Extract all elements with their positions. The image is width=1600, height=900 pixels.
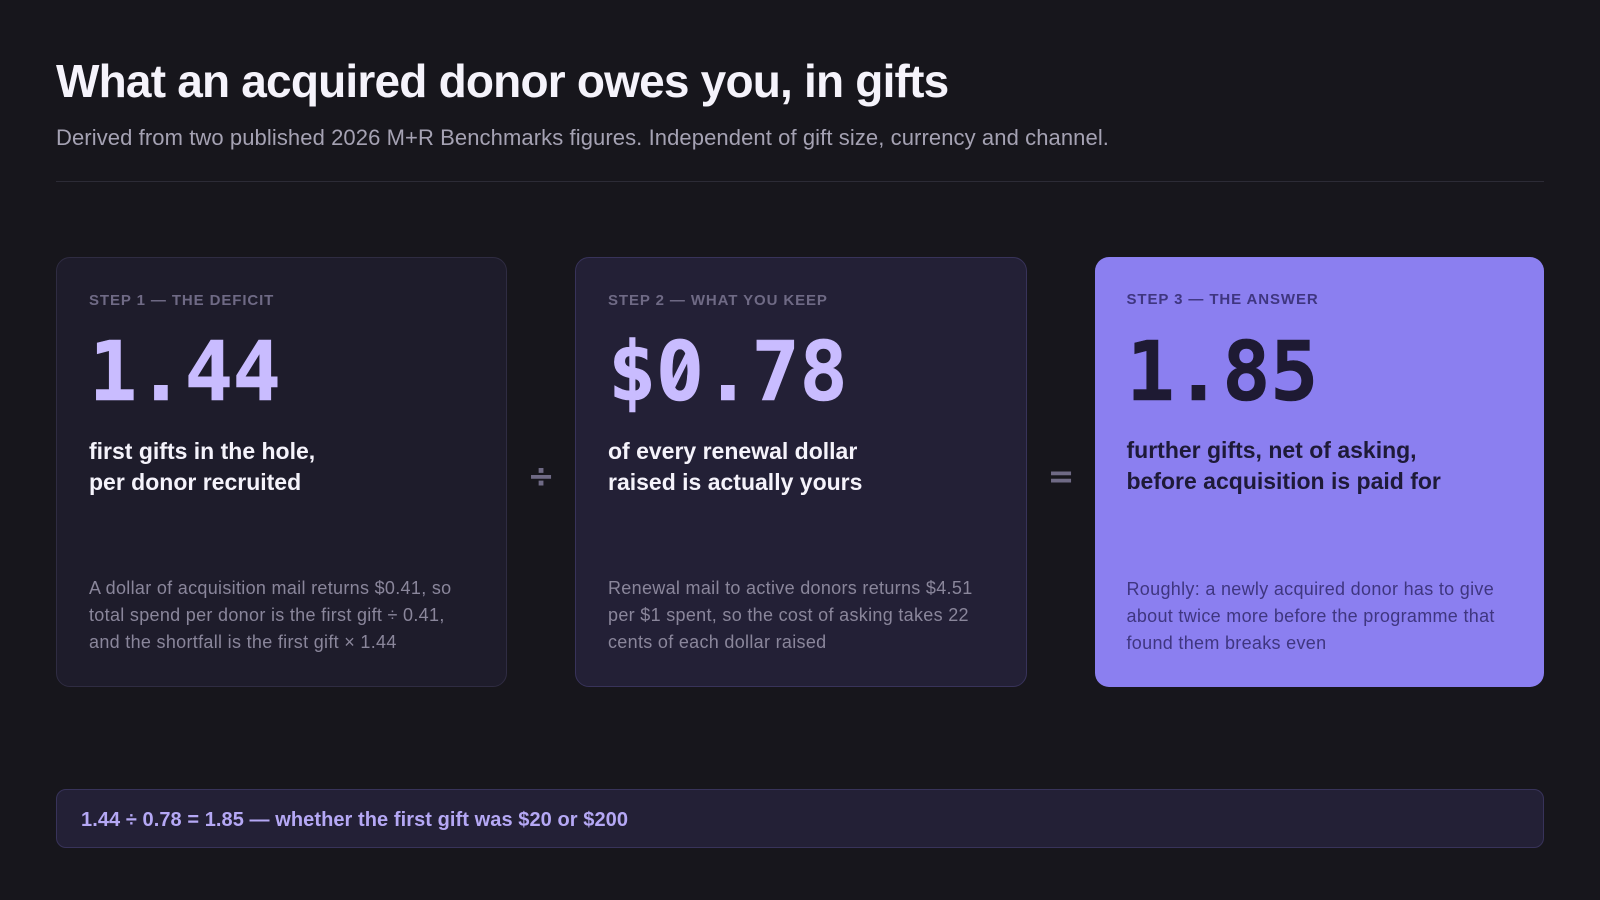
- step 2 explanation: cents of each dollar raised: [608, 632, 826, 652]
- step 2 label: STEP 2 — WHAT YOU KEEP: [608, 292, 828, 309]
- step 3 number: 1.85: [1126, 325, 1318, 419]
- step 1 headline: [89, 438, 315, 495]
- step 1 explanation: and the shortfall is the first gift × 1.44: [89, 632, 397, 652]
- step 3 label: STEP 3 — THE ANSWER: [1126, 291, 1319, 308]
- step 3 explanation: [1126, 579, 1495, 653]
- step 3 headline: further gifts, net of asking,: [1126, 437, 1417, 463]
- step 2 headline: of every renewal dollar: [608, 438, 857, 464]
- step 3 headline: [1126, 437, 1441, 494]
- step 3 explanation: Roughly: a newly acquired donor has to give: [1126, 579, 1494, 599]
- icon: equals operator: =: [1048, 457, 1074, 495]
- step 2 headline: [608, 438, 862, 495]
- subtitle: Derived from two published 2026 M+R Benchmarks figures. Independent of gift size, currency and channel.: [56, 125, 1109, 150]
- panel: step 2 what you keep: [575, 257, 1027, 687]
- panel: step 1 the deficit: [56, 257, 507, 687]
- icon: divide operator: ÷: [528, 457, 554, 495]
- step 1 explanation: A dollar of acquisition mail returns $0.41, so: [89, 578, 451, 598]
- step 2 explanation: per $1 spent, so the cost of asking takes 22: [608, 605, 969, 625]
- step 1 headline: first gifts in the hole,: [89, 438, 315, 464]
- step 1 explanation: total spend per donor is the first gift ÷ 0.41,: [89, 605, 445, 625]
- step 2 headline: raised is actually yours: [608, 469, 862, 495]
- summary text: 1.44 ÷ 0.78 = 1.85 — whether the first gift was $20 or $200: [81, 809, 628, 831]
- step 1 explanation: [89, 578, 451, 652]
- step 3 explanation: found them breaks even: [1126, 633, 1326, 653]
- step 1 label: STEP 1 — THE DEFICIT: [89, 292, 274, 309]
- title: What an acquired donor owes you, in gifts: [56, 55, 948, 107]
- step 2 explanation: [608, 578, 973, 652]
- step 1 headline: per donor recruited: [89, 469, 301, 495]
- step 2 number: $0.78: [608, 325, 847, 419]
- step 1 number: 1.44: [89, 325, 280, 419]
- step 3 headline: before acquisition is paid for: [1126, 468, 1441, 494]
- callout: formula summary bar: [56, 789, 1544, 848]
- step 2 explanation: Renewal mail to active donors returns $4.51: [608, 578, 973, 598]
- step 3 explanation: about twice more before the programme that: [1126, 606, 1495, 626]
- panel: step 3 the answer: [1095, 257, 1544, 687]
